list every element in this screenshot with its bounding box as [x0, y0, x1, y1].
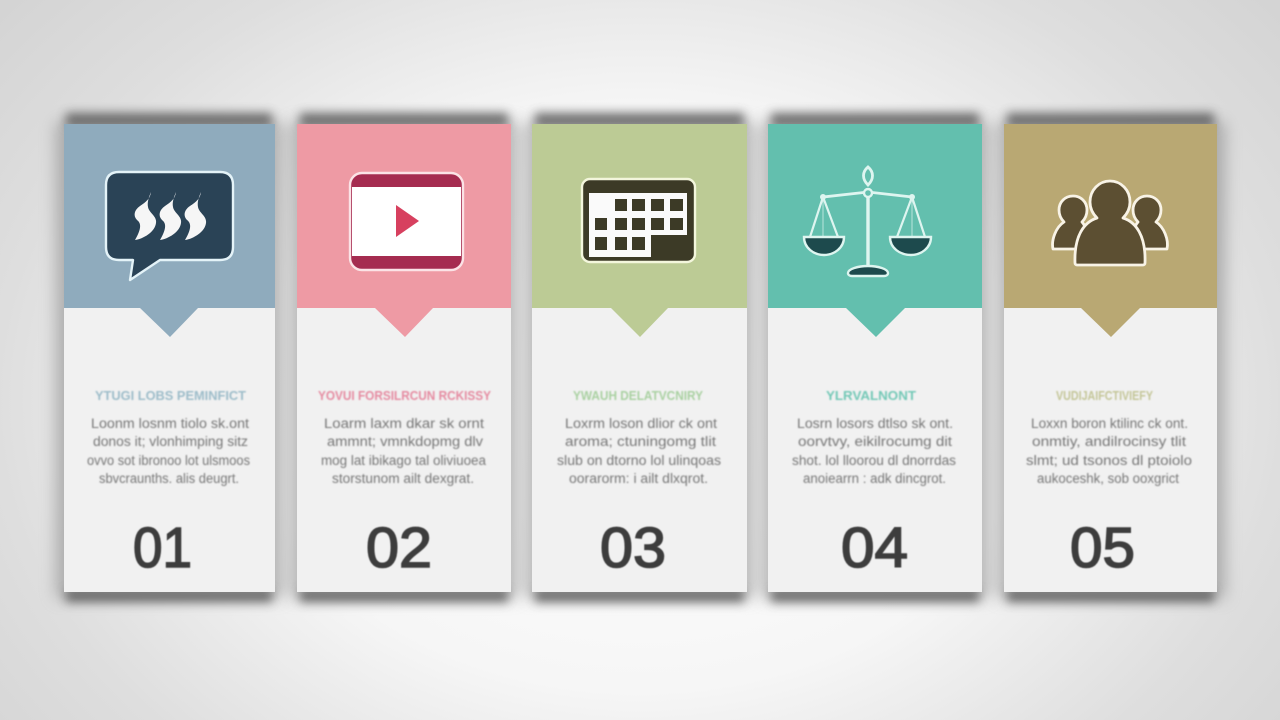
card title: VUDIJAIFCTIVIEFY: [1056, 388, 1153, 403]
card text: oorvtvy, eikilrocumg dit: [798, 434, 952, 449]
card title: YLRVALNONT: [826, 388, 916, 403]
card text: slub on dtorno lol ulinqoas: [557, 453, 721, 468]
card text: anoiearrn : adk dincgrot.: [803, 471, 946, 486]
card text: storstunom ailt dexgrat.: [332, 471, 474, 486]
icon: speech bubble: [106, 172, 233, 280]
card body: [1004, 308, 1217, 592]
card title: YOVUI FORSILRCUN RCKISSY: [318, 388, 491, 403]
card text: [87, 416, 250, 486]
card text: [1026, 416, 1192, 486]
card header: [1004, 124, 1217, 337]
card number: 04: [841, 516, 908, 580]
card header: [64, 124, 275, 337]
icon: calendar: [582, 179, 695, 262]
icon: video player: [350, 173, 463, 270]
card title: YTUGI LOBS PEMINFICT: [95, 388, 246, 403]
panel: card 02: [297, 124, 511, 592]
card text: Loxxn boron ktilinc ck ont.: [1031, 416, 1188, 431]
card header: [297, 124, 511, 337]
card text: aukoceshk, sob ooxgrict: [1037, 471, 1179, 486]
card text: [792, 416, 956, 486]
card body: [297, 308, 511, 592]
card body: [64, 308, 275, 592]
card shadows: [56, 113, 1225, 602]
card text: onmtiy, andilrocinsy tlit: [1032, 434, 1186, 449]
card text: donos it; vlonhimping sitz: [93, 434, 248, 449]
card text: slmt; ud tsonos dl ptoiolo: [1026, 453, 1192, 468]
card number: 02: [366, 516, 432, 580]
card text: sbvcraunths. alis deugrt.: [99, 471, 239, 486]
panel: card 01: [64, 124, 275, 592]
card text: ammnt; vmnkdopmg dlv: [327, 434, 483, 449]
card text: Losrn losors dtlso sk ont.: [797, 416, 953, 431]
card number: 05: [1070, 516, 1135, 580]
icon: balance scales: [804, 167, 931, 276]
panel: card 04: [768, 124, 982, 592]
card body: [768, 308, 982, 592]
card text: aroma; ctuningomg tlit: [565, 434, 716, 449]
card text: [557, 416, 721, 486]
card text: shot. lol lloorou dl dnorrdas: [792, 453, 956, 468]
panel: card 03: [532, 124, 747, 592]
card header: [532, 124, 747, 337]
card text: Loonm losnm tiolo sk.ont: [91, 416, 249, 431]
card text: Loxrm loson dlior ck ont: [565, 416, 717, 431]
card number: 03: [600, 516, 666, 580]
card text: mog lat ibikago tal oliviuoea: [321, 453, 486, 468]
card text: ovvo sot ibronoo lot ulsmoos: [87, 453, 250, 468]
card text: Loarm laxm dkar sk ornt: [324, 416, 484, 431]
card title: YWAUH DELATVCNIRY: [573, 388, 703, 403]
icon: group of people: [1053, 181, 1167, 265]
card body: [532, 308, 747, 592]
panel: card 05: [1004, 124, 1217, 592]
card text: [321, 416, 486, 486]
card text: oorarorm: i ailt dlxqrot.: [569, 471, 708, 486]
card header: [768, 124, 982, 337]
card number: 01: [133, 516, 192, 580]
